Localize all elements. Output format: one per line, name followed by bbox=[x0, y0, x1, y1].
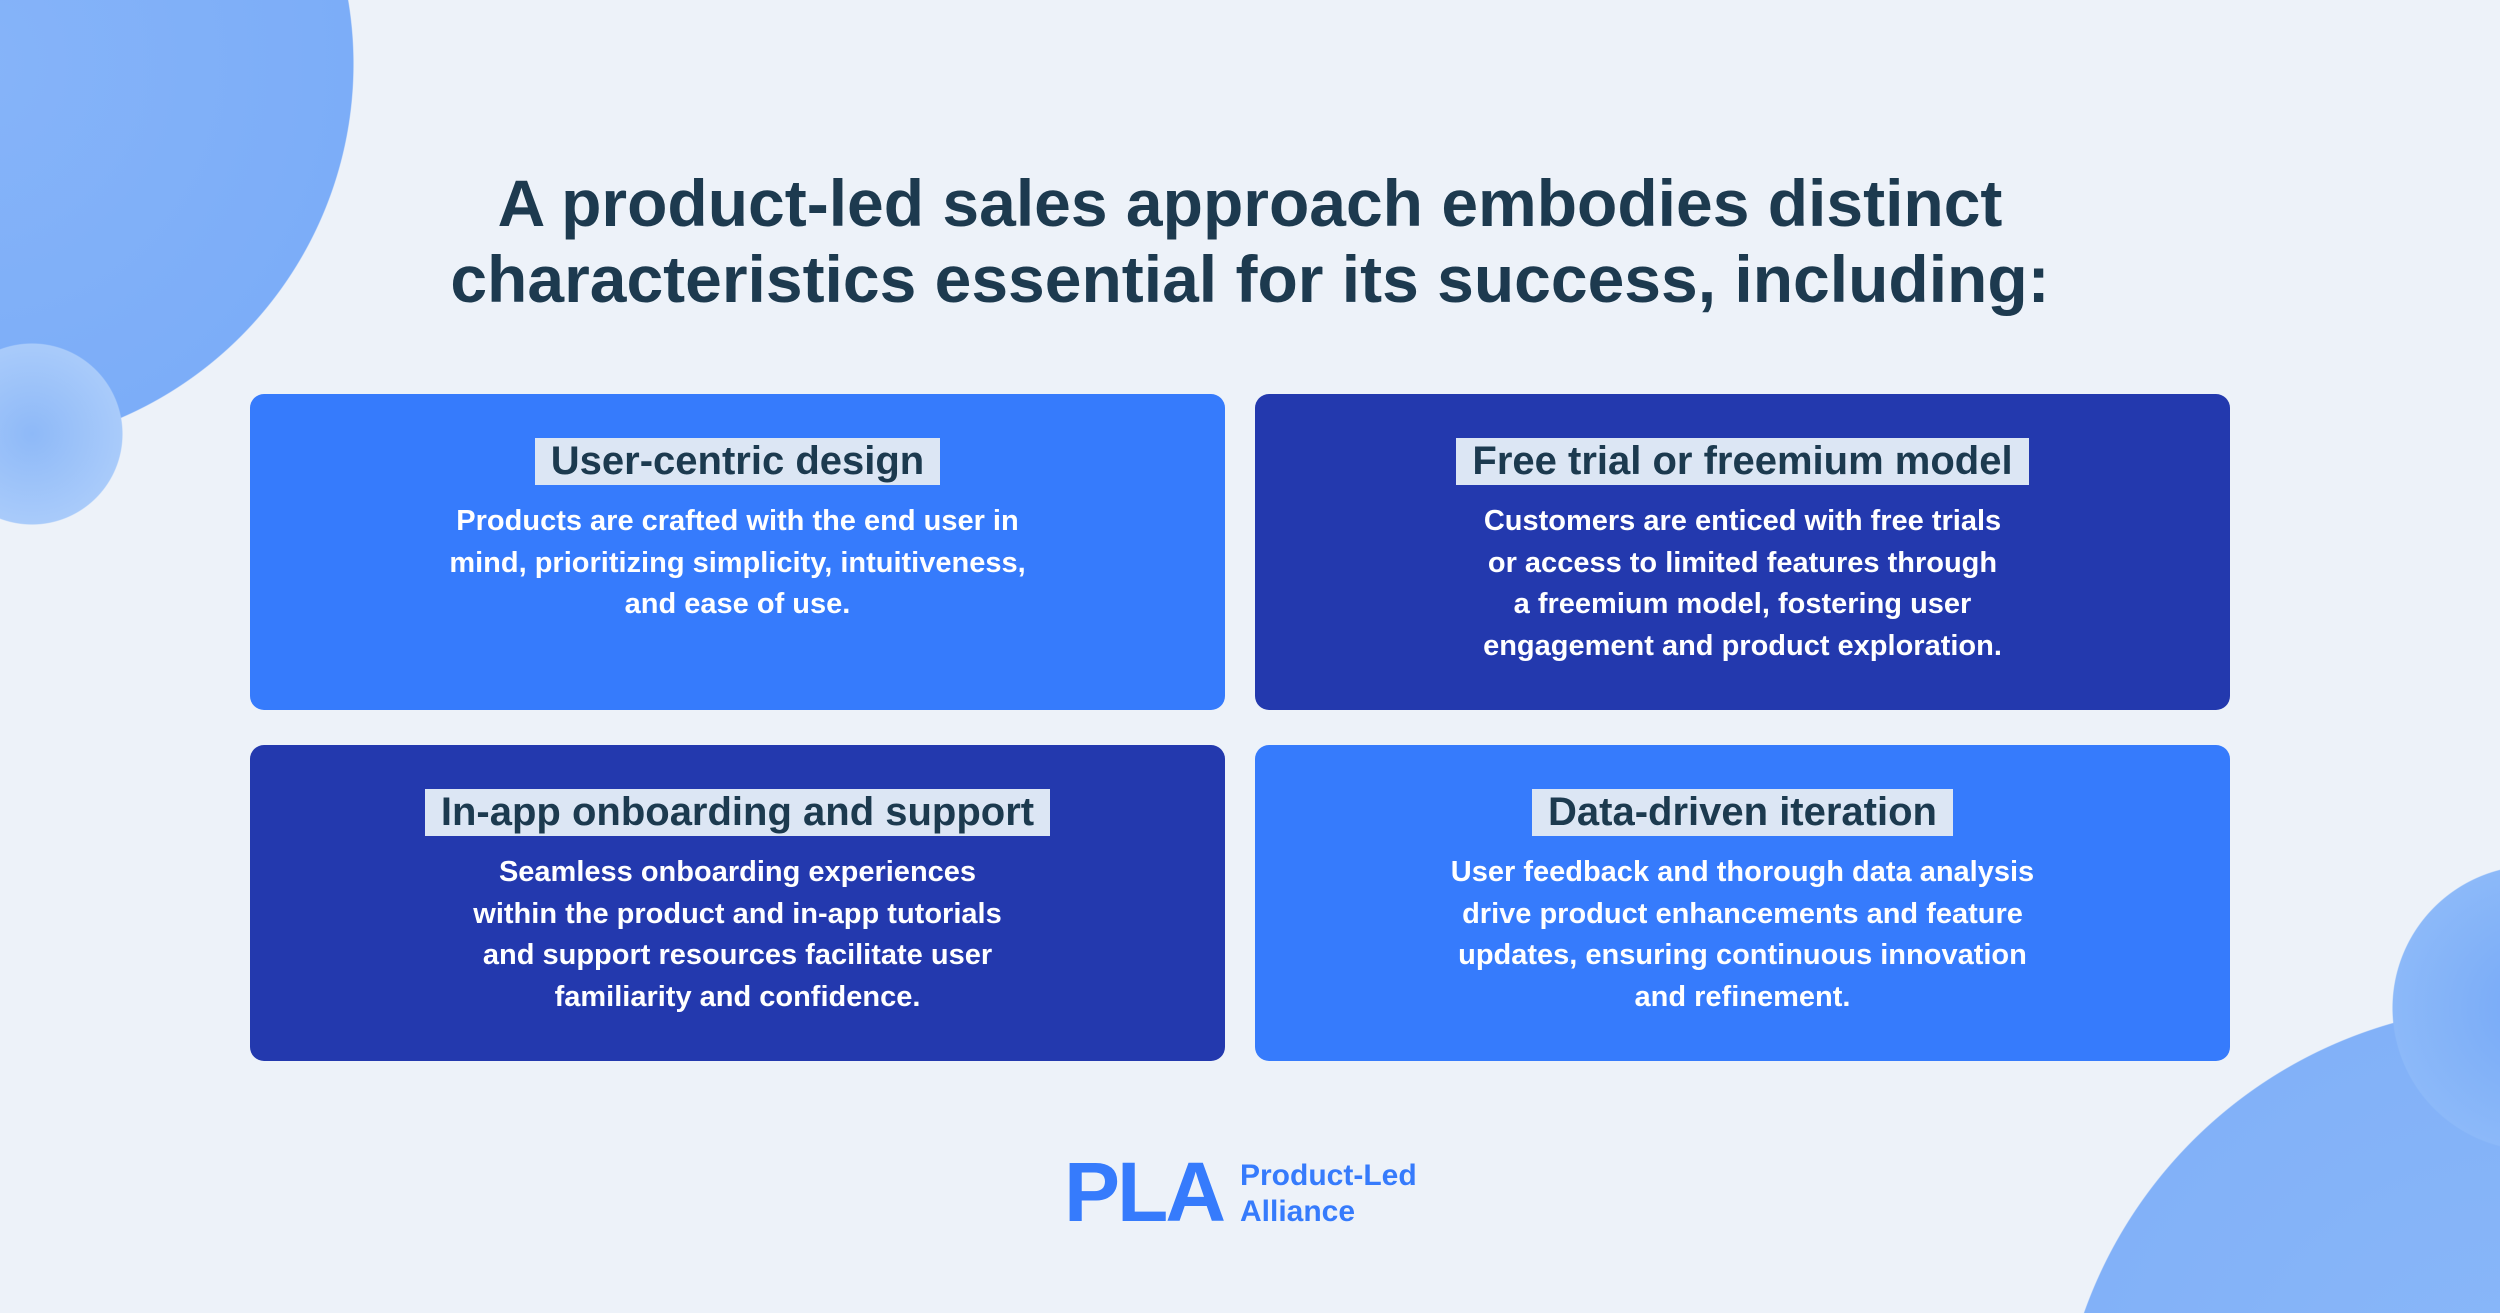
text: data-driven description: User feedback and thorough data analysis bbox=[1451, 856, 2034, 888]
logo text: Alliance bbox=[1240, 1195, 1355, 1228]
logo text bbox=[1240, 1159, 1417, 1228]
text: onboarding description: within the product and in-app tutorials bbox=[473, 898, 1002, 930]
heading: in-app onboarding: In-app onboarding and support bbox=[441, 790, 1034, 834]
text: user-centric description: and ease of use. bbox=[625, 588, 850, 620]
logo bbox=[1064, 1145, 1417, 1239]
text: onboarding description: familiarity and confidence. bbox=[555, 980, 920, 1012]
text: user-centric description: Products are crafted with the end user in bbox=[456, 505, 1019, 537]
title: A product-led sales approach embodies distinct bbox=[498, 166, 2002, 240]
panel: user-centric design bbox=[250, 394, 1225, 710]
text: data-driven description: and refinement. bbox=[1635, 980, 1850, 1012]
logo text: Product-Led bbox=[1240, 1159, 1417, 1192]
panel: free trial bbox=[1255, 394, 2230, 710]
title bbox=[450, 166, 2050, 316]
text: free trial description: or access to limited features through bbox=[1488, 546, 1997, 578]
text: free trial description: a freemium model, fostering user bbox=[1514, 588, 1971, 620]
heading: free trial: Free trial or freemium model bbox=[1472, 439, 2013, 483]
logo mark: PLA: PLA bbox=[1064, 1145, 1223, 1239]
heading: data-driven iteration: Data-driven iteration bbox=[1548, 790, 1937, 834]
text: onboarding description bbox=[473, 856, 1002, 1012]
panel: data-driven iteration bbox=[1255, 745, 2230, 1061]
text: data-driven description: drive product enhancements and feature bbox=[1462, 898, 2023, 930]
text: free trial description: engagement and product exploration. bbox=[1483, 630, 2002, 662]
text: data-driven description: updates, ensuring continuous innovation bbox=[1458, 939, 2027, 971]
heading: user-centric design: User-centric design bbox=[551, 439, 924, 483]
title: characteristics essential for its success, including: bbox=[450, 242, 2050, 316]
text: data-driven description bbox=[1451, 856, 2034, 1012]
text: onboarding description: Seamless onboarding experiences bbox=[499, 856, 976, 888]
text: user-centric description bbox=[449, 505, 1026, 620]
text: user-centric description: mind, prioritizing simplicity, intuitiveness, bbox=[449, 546, 1026, 578]
text: free trial description: Customers are enticed with free trials bbox=[1484, 505, 2001, 537]
text: onboarding description: and support resources facilitate user bbox=[483, 939, 992, 971]
panel: in-app onboarding bbox=[250, 745, 1225, 1061]
text: free trial description bbox=[1483, 505, 2002, 662]
